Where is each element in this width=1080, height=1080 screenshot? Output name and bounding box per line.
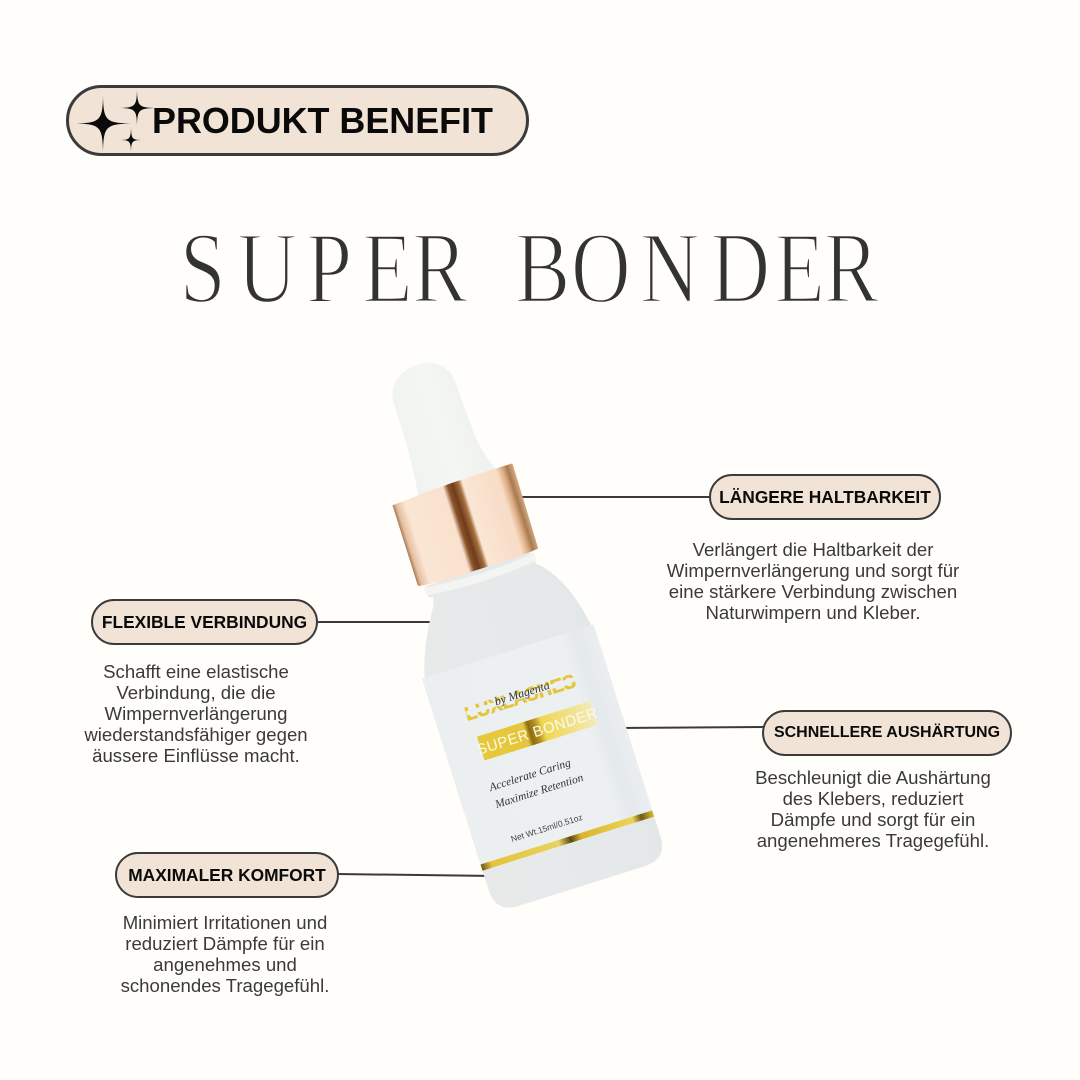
text: flexible verbindung: wiederstandsfähiger gegen (84, 724, 308, 745)
pill: längere haltbarkeit (709, 474, 941, 520)
pill: flexible verbindung (91, 599, 318, 645)
text: längere haltbarkeit: Naturwimpern und Kleber. (706, 602, 920, 623)
brand logo: LUXLASHES (462, 671, 578, 726)
text: längere haltbarkeit (666, 539, 959, 623)
gold stripe (481, 810, 654, 871)
bottle body (396, 541, 668, 913)
pill: längere haltbarkeit: LÄNGERE HALTBARKEIT (719, 486, 931, 506)
dropper bulb (380, 350, 501, 501)
badge: produkt benefit: PRODUKT BENEFIT (152, 101, 493, 141)
text: längere haltbarkeit: Verlängert die Haltbarkeit der (693, 539, 933, 560)
text: flexible verbindung: Wimpernverlängerung (105, 703, 287, 724)
label (422, 624, 654, 871)
callout: schnellere aushärtung (755, 710, 1012, 851)
tagline: Maximize Retention (493, 772, 585, 811)
text: schnellere aushärtung (755, 767, 991, 851)
callout: flexible verbindung (84, 599, 318, 766)
text: flexible verbindung: äussere Einflüsse macht. (92, 745, 300, 766)
collar ring (424, 553, 538, 599)
text: schnellere aushärtung: Beschleunigt die Aushärtung (755, 767, 991, 788)
text: maximaler komfort: Minimiert Irritationen und (123, 912, 327, 933)
text: maximaler komfort: reduziert Dämpfe für ein (125, 933, 325, 954)
text: schnellere aushärtung: des Klebers, reduziert (783, 788, 963, 809)
text: schnellere aushärtung: Dämpfe und sorgt für ein (771, 809, 975, 830)
callout: maximaler komfort (115, 852, 339, 996)
pill: flexible verbindung: FLEXIBLE VERBINDUNG (102, 612, 307, 632)
text: flexible verbindung: Verbindung, die die (116, 682, 276, 703)
text: schnellere aushärtung: angenehmeres Tragegefühl. (757, 830, 989, 851)
pill: schnellere aushärtung: SCHNELLERE AUSHÄRTUNG (774, 724, 1000, 741)
text: maximaler komfort: schonendes Tragegefühl. (121, 975, 329, 996)
text: längere haltbarkeit: eine stärkere Verbindung zwischen (669, 581, 957, 602)
text: maximaler komfort: angenehmes und (153, 954, 297, 975)
text: maximaler komfort (121, 912, 329, 996)
text: flexible verbindung: Schafft eine elastische (103, 661, 289, 682)
brand logo: by Magenta (493, 678, 551, 708)
text: längere haltbarkeit: Wimpernverlängerung und sorgt für (667, 560, 959, 581)
callout: längere haltbarkeit (666, 474, 959, 623)
tagline: Accelerate Caring (487, 757, 573, 794)
net weight: Net Wt.15ml/0.51oz (510, 812, 584, 844)
pill: schnellere aushärtung (762, 710, 1012, 756)
text: flexible verbindung (84, 661, 308, 766)
pill: maximaler komfort: MAXIMALER KOMFORT (128, 864, 326, 884)
rose gold collar (391, 463, 540, 590)
badge: produkt benefit (66, 85, 529, 156)
pill: maximaler komfort (115, 852, 339, 898)
gold name strip: SUPER BONDER (475, 705, 600, 759)
title: SUPERBONDER (180, 212, 879, 325)
